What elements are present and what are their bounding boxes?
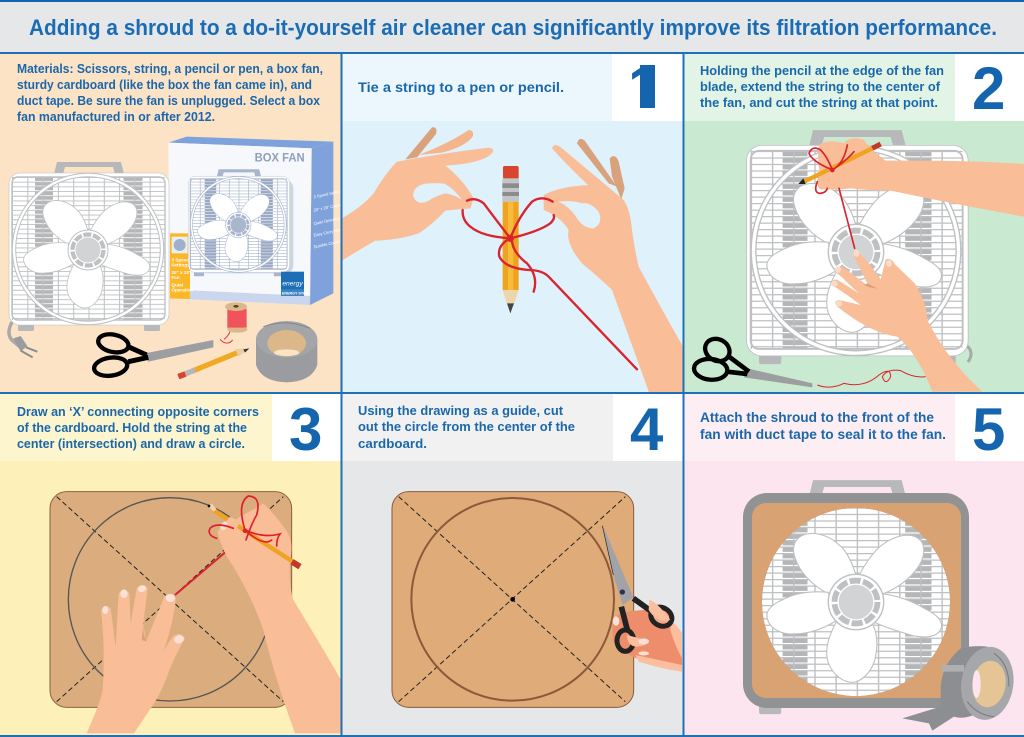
illustration: cardboard, hands and pencil	[50, 492, 341, 733]
materials text	[17, 61, 323, 124]
step number 5: 5	[972, 396, 1005, 463]
panel: step 3	[0, 394, 341, 735]
product box: energy	[282, 281, 303, 288]
power cord	[9, 322, 20, 347]
product box: ENERGY STAR	[282, 291, 308, 295]
step 5 text	[700, 410, 946, 442]
materials text: sturdy cardboard (like the box the fan came in), and	[17, 77, 312, 92]
panel: step 4	[342, 394, 684, 735]
product box: Durable Construction	[313, 237, 351, 249]
step number 1: 1	[628, 54, 661, 121]
step 3 text	[17, 404, 259, 451]
illustration: hands and pencil	[342, 127, 683, 393]
panel: materials	[0, 54, 351, 393]
step 2 text: Holding the pencil at the edge of the fan	[700, 63, 944, 78]
duct tape frame	[743, 493, 969, 708]
product box: Easy Carry Handle	[313, 226, 348, 238]
step 5 text: fan with duct tape to seal it to the fan.	[700, 427, 946, 442]
pencil	[178, 348, 249, 377]
product box	[168, 137, 351, 305]
duct tape roll	[902, 643, 1018, 731]
product box: Settings	[171, 263, 190, 268]
step number 3: 3	[289, 396, 322, 463]
duct tape roll	[256, 321, 317, 382]
product box: Quiet	[171, 283, 184, 288]
box fan	[747, 130, 968, 364]
step 2 text: blade, extend the string to the center of	[700, 79, 941, 94]
step number 4: 4	[630, 396, 664, 463]
product box: Fan	[171, 275, 180, 280]
fan cord	[966, 345, 971, 362]
illustration: hands, pencil and string	[693, 138, 1024, 392]
step 2 text: the fan, and cut the string at that point.	[700, 95, 938, 110]
top rule	[0, 0, 1024, 2]
step 3 text: of the cardboard. Hold the string at the	[17, 420, 247, 435]
scissors	[93, 332, 213, 378]
materials text: Materials: Scissors, string, a pencil or pen, a box fan,	[17, 61, 323, 76]
product box: 3 Speed	[171, 258, 189, 263]
product box: Operation	[171, 288, 193, 293]
spool of string	[220, 302, 247, 343]
product box: 20" x 20"	[171, 270, 191, 275]
illustration: cardboard and scissors	[392, 492, 682, 707]
product box: Quiet Operation	[313, 215, 342, 226]
step 3 text: center (intersection) and draw a circle.	[17, 436, 245, 451]
panel: step 2	[684, 54, 1024, 393]
step number 2: 2	[972, 55, 1005, 122]
step 4 text: out the circle from the center of the	[358, 419, 575, 434]
step 4 text: cardboard.	[358, 436, 427, 451]
title: Adding a shroud to a do-it-yourself air cleaner can significantly improve its filtration performance.	[29, 15, 997, 40]
panel: step 5	[684, 394, 1024, 735]
plug	[13, 336, 37, 357]
product box: BOX FAN	[255, 150, 305, 164]
step 4 text	[358, 403, 575, 451]
step 1 text: Tie a string to a pen or pencil.	[358, 79, 564, 95]
step 5 text: Attach the shroud to the front of the	[700, 410, 934, 425]
materials text: fan manufactured in or after 2012.	[17, 109, 215, 124]
materials text: duct tape. Be sure the fan is unplugged. Select a box	[17, 93, 321, 108]
step 4 text: Using the drawing as a guide, cut	[358, 403, 564, 418]
box fan behind shroud	[759, 480, 950, 714]
product box: 20" x 20" Capacity	[313, 201, 346, 213]
panel: step 1	[342, 54, 684, 393]
product box: 3 Speed Settings	[313, 188, 344, 199]
step 2 text	[700, 63, 944, 110]
box fan	[9, 162, 169, 331]
cardboard shroud	[752, 503, 961, 698]
step 3 text: Draw an ‘X’ connecting opposite corners	[17, 404, 259, 419]
